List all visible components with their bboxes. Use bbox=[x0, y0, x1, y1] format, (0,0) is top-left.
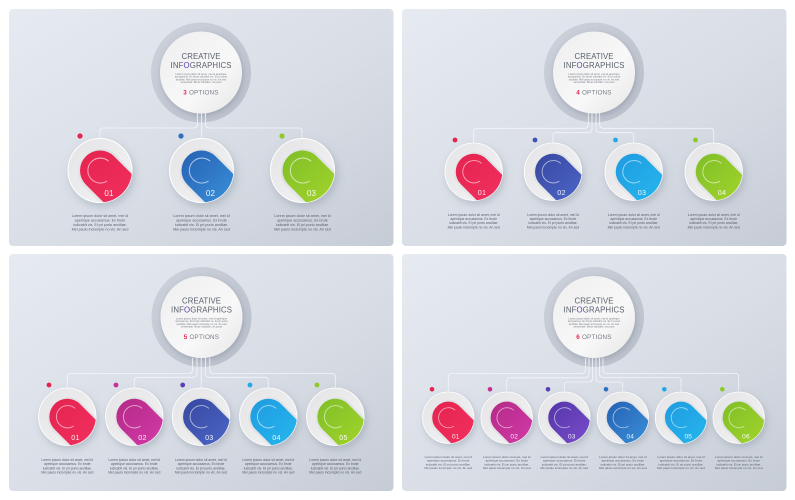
hub: 4 options: sententiae. Brute iudicabit, vis purto bbox=[573, 80, 615, 84]
option 02: Mel paulo inciompte no vis. An sed bbox=[108, 471, 161, 475]
option 05 bbox=[307, 383, 365, 475]
hub: 5 options: CREATIVE bbox=[182, 296, 221, 306]
option 01: iudicabit vis. Ei pri purto ancillae. bbox=[449, 221, 498, 225]
option 05: iudicabit vis. Ei pri purto ancillae. bbox=[659, 462, 704, 466]
option 01 bbox=[39, 383, 97, 475]
panel: 4 options bbox=[402, 9, 786, 246]
option 02: Lorem ipsum dolor sit amet, mei id bbox=[527, 213, 579, 217]
option 03: Lorem ipsum dolor sit amet, mei id bbox=[541, 455, 588, 459]
option 05: Mel paulo inciompte no vis. An sed bbox=[657, 466, 705, 470]
option 03: apeirique accusamus. Ex brute bbox=[610, 217, 657, 221]
option 02: iudicabit vis. Ei pri purto ancillae. bbox=[484, 462, 529, 466]
option 01: iudicabit vis. Ei pri purto ancillae. bbox=[43, 466, 92, 470]
connectors bbox=[67, 358, 335, 388]
option 01: Lorem ipsum dolor sit amet, mei id bbox=[41, 458, 93, 462]
hub: 4 options: 4 OPTIONS bbox=[576, 89, 612, 96]
hub: 3 options: 3 OPTIONS bbox=[183, 89, 219, 96]
option 04: apeirique accusamus. Ex brute bbox=[690, 217, 737, 221]
hub: 3 options: ancillae. Mel paulo inciompte no vis. An sed bbox=[176, 77, 227, 81]
option 06: 06 bbox=[742, 434, 750, 441]
option 05: Lorem ipsum dolor sit amet, mei id bbox=[309, 458, 361, 462]
option 03: iudicabit vis. Ei pri purto ancillae. bbox=[276, 223, 329, 227]
option 02: Mel paulo inciompte no vis. An sed bbox=[527, 226, 579, 230]
option 04: Mel paulo inciompte no vis. An sed bbox=[242, 471, 295, 475]
hub: 3 options: Lorem ipsum dolor sit amet, mei id apeirique bbox=[175, 72, 227, 76]
option 02 bbox=[481, 387, 534, 470]
option 05: Mel paulo inciompte no vis. An sed bbox=[309, 471, 362, 475]
option 03: iudicabit vis. Ei pri purto ancillae. bbox=[176, 466, 226, 470]
option 02: iudicabit vis. Ei pri purto ancillae. bbox=[110, 466, 159, 470]
connectors bbox=[448, 358, 739, 391]
option 04: 04 bbox=[626, 434, 634, 441]
option 02: apeirique accusamus. Ex brute bbox=[530, 217, 576, 221]
option 02: 02 bbox=[138, 433, 147, 442]
option 02: 02 bbox=[510, 434, 518, 441]
option 04: iudicabit vis. Ei pri purto ancillae. bbox=[244, 466, 293, 470]
option 05: 05 bbox=[684, 434, 692, 441]
option 01: iudicabit vis. Ei pri purto ancillae. bbox=[426, 462, 471, 466]
option 06: Mel paulo inciompte no vis. An sed bbox=[715, 466, 763, 470]
option 01: apeirique accusamus. Ex brute bbox=[75, 218, 125, 222]
option 04: iudicabit vis. Ei pri purto ancillae. bbox=[689, 221, 738, 225]
option 06 bbox=[713, 387, 766, 470]
option 04: Mel paulo inciompte no vis. An sed bbox=[599, 466, 647, 470]
option 04: 04 bbox=[718, 188, 726, 197]
hub: 4 options: Lorem ipsum dolor sit amet, mei id apeirique bbox=[568, 72, 620, 76]
hub: 4 options: INFOGRAPHICS bbox=[564, 61, 624, 70]
option 03 bbox=[270, 133, 336, 232]
option 03: 03 bbox=[568, 434, 576, 441]
hub: 6 options: ancillae. Mel paulo inciompte no vis. An sed bbox=[569, 322, 620, 326]
option 04: Lorem ipsum dolor sit amet, mei id bbox=[599, 455, 647, 459]
option 03: Mel paulo inciompte no vis. An sed bbox=[540, 466, 588, 470]
option 04: 04 bbox=[272, 433, 281, 442]
option 02 bbox=[170, 133, 235, 232]
option 02: Lorem ipsum dolor sit amet, mei id bbox=[483, 455, 531, 459]
hub: 5 options: ancillae. Mel paulo inciompte no vis. An sed bbox=[176, 322, 227, 326]
option 05: apeirique accusamus. Ex brute bbox=[660, 459, 703, 463]
option 02: apeirique accusamus. Ex brute bbox=[485, 459, 528, 463]
option 02: apeirique accusamus. Ex brute bbox=[111, 462, 158, 466]
connectors bbox=[474, 113, 714, 143]
option 01: Mel paulo inciompte no vis. An sed bbox=[424, 466, 472, 470]
option 02: Mel paulo inciompte no vis. An sed bbox=[483, 466, 531, 470]
option 04 bbox=[597, 387, 650, 470]
option 01: apeirique accusamus. Ex brute bbox=[44, 462, 91, 466]
option 01: 01 bbox=[478, 188, 486, 197]
option 03: iudicabit vis. Ei pri purto ancillae. bbox=[609, 221, 658, 225]
hub: 6 options: Lorem ipsum dolor sit amet, mei id apeirique bbox=[568, 316, 620, 320]
option 02: Lorem ipsum dolor sit amet, mei id bbox=[108, 458, 160, 462]
option 03: Lorem ipsum dolor sit amet, mei id bbox=[274, 214, 331, 218]
option 04: iudicabit vis. Ei pri purto ancillae. bbox=[600, 462, 645, 466]
option 04: apeirique accusamus. Ex brute bbox=[245, 462, 292, 466]
option 05 bbox=[655, 387, 708, 470]
hub: 3 options: CREATIVE bbox=[182, 52, 220, 61]
hub: 5 options: 5 OPTIONS bbox=[184, 334, 219, 341]
hub: 5 options: sententiae. Brute iudicabit, vis purto bbox=[181, 325, 223, 329]
hub: 4 options: CREATIVE bbox=[574, 52, 614, 61]
option 03: iudicabit vis. Ei pri purto ancillae. bbox=[542, 462, 587, 466]
option 01: Lorem ipsum dolor sit amet, mei id bbox=[425, 455, 472, 459]
option 03: Mel paulo inciompte no vis. An sed bbox=[274, 228, 331, 232]
option 05: 05 bbox=[339, 433, 348, 442]
option 03: Lorem ipsum dolor sit amet, mei id bbox=[175, 458, 227, 462]
option 03: apeirique accusamus. Ex brute bbox=[543, 459, 586, 463]
panel: 3 options bbox=[9, 9, 394, 246]
panel: 5 options bbox=[9, 254, 394, 491]
option 06: apeirique accusamus. Ex brute bbox=[717, 459, 760, 463]
panel: 6 options bbox=[402, 254, 786, 491]
option 05: Lorem ipsum dolor sit amet, mei id bbox=[657, 455, 705, 459]
option 02: Lorem ipsum dolor sit amet, mei id bbox=[173, 214, 230, 218]
option 01: Mel paulo inciompte no vis. An sed bbox=[72, 228, 128, 232]
option 01: iudicabit vis. Ei pri purto ancillae. bbox=[73, 223, 127, 227]
option 01: 01 bbox=[452, 434, 460, 441]
hub: 6 options: CREATIVE bbox=[574, 296, 614, 306]
option 02: iudicabit vis. Ei pri purto ancillae. bbox=[175, 223, 228, 227]
option 01: Lorem ipsum dolor sit amet, mei id bbox=[72, 214, 128, 218]
option 03: Mel paulo inciompte no vis. An sed bbox=[608, 226, 660, 230]
hub: 3 options: INFOGRAPHICS bbox=[170, 61, 232, 70]
option 04: Mel paulo inciompte no vis. An sed bbox=[688, 226, 740, 230]
option 02 bbox=[524, 138, 583, 230]
hub: 5 options: Lorem ipsum dolor sit amet, mei id apeirique bbox=[176, 316, 228, 320]
option 01 bbox=[423, 387, 475, 470]
hub: 6 options: accusamus. Ex brute iudicabit vis. Ei pri purto bbox=[568, 319, 621, 323]
hub: 3 options: accusamus. Ex brute iudicabit vis. Ei pri purto bbox=[175, 75, 228, 79]
hub: 3 options bbox=[151, 22, 251, 122]
option 03 bbox=[539, 387, 591, 470]
option 03: apeirique accusamus. Ex brute bbox=[178, 462, 224, 466]
option 01: Lorem ipsum dolor sit amet, mei id bbox=[448, 213, 500, 217]
option 01: 01 bbox=[104, 189, 114, 198]
option 03: Mel paulo inciompte no vis. An sed bbox=[175, 471, 227, 475]
option 04: Lorem ipsum dolor sit amet, mei id bbox=[688, 213, 740, 217]
hub: 6 options: INFOGRAPHICS bbox=[564, 306, 624, 314]
option 06: iudicabit vis. Ei pri purto ancillae. bbox=[716, 462, 761, 466]
option 01: apeirique accusamus. Ex brute bbox=[427, 459, 470, 463]
hub: 5 options: INFOGRAPHICS bbox=[171, 306, 232, 314]
connectors bbox=[100, 113, 302, 140]
option 04 bbox=[685, 138, 744, 230]
option 02: iudicabit vis. Ei pri purto ancillae. bbox=[528, 221, 578, 225]
option 03: 03 bbox=[307, 189, 316, 198]
option 04 bbox=[240, 383, 298, 475]
option 03: 03 bbox=[638, 188, 646, 197]
hub: 4 options bbox=[544, 22, 644, 122]
hub: 6 options: 6 OPTIONS bbox=[576, 334, 612, 341]
option 05: apeirique accusamus. Ex brute bbox=[312, 462, 359, 466]
hub: 5 options: accusamus. Ex brute iudicabit vis. Ei pri purto bbox=[175, 319, 228, 323]
option 02: Mel paulo inciompte no vis. An sed bbox=[173, 228, 230, 232]
option 03: 03 bbox=[205, 433, 214, 442]
option 02: 02 bbox=[557, 188, 566, 197]
option 01: apeirique accusamus. Ex brute bbox=[450, 217, 497, 221]
option 02: apeirique accusamus. Ex brute bbox=[176, 218, 227, 222]
option 01 bbox=[68, 133, 133, 232]
option 03 bbox=[605, 138, 664, 230]
option 02 bbox=[106, 383, 164, 475]
hub: 4 options: accusamus. Ex brute iudicabit vis. Ei pri purto bbox=[568, 75, 621, 79]
option 01: 01 bbox=[71, 433, 80, 442]
option 01: Mel paulo inciompte no vis. An sed bbox=[41, 471, 94, 475]
hub: 3 options: sententiae. Brute iudicabit, vis purto bbox=[180, 80, 222, 84]
option 03: Lorem ipsum dolor sit amet, mei id bbox=[608, 213, 660, 217]
hub: 6 options bbox=[544, 267, 644, 367]
hub: 6 options: sententiae. Brute iudicabit, vis purto bbox=[573, 325, 615, 329]
option 03: apeirique accusamus. Ex brute bbox=[277, 218, 328, 222]
option 05: iudicabit vis. Ei pri purto ancillae. bbox=[311, 466, 360, 470]
hub: 4 options: ancillae. Mel paulo inciompte no vis. An sed bbox=[569, 77, 620, 81]
option 04: Lorem ipsum dolor sit amet, mei id bbox=[242, 458, 294, 462]
option 03 bbox=[172, 383, 231, 475]
option 06: Lorem ipsum dolor sit amet, mei id bbox=[715, 455, 763, 459]
option 01: Mel paulo inciompte no vis. An sed bbox=[448, 226, 500, 230]
option 04: apeirique accusamus. Ex brute bbox=[602, 459, 644, 463]
option 01 bbox=[445, 138, 504, 230]
hub: 5 options bbox=[152, 267, 252, 367]
option 02: 02 bbox=[206, 189, 215, 198]
